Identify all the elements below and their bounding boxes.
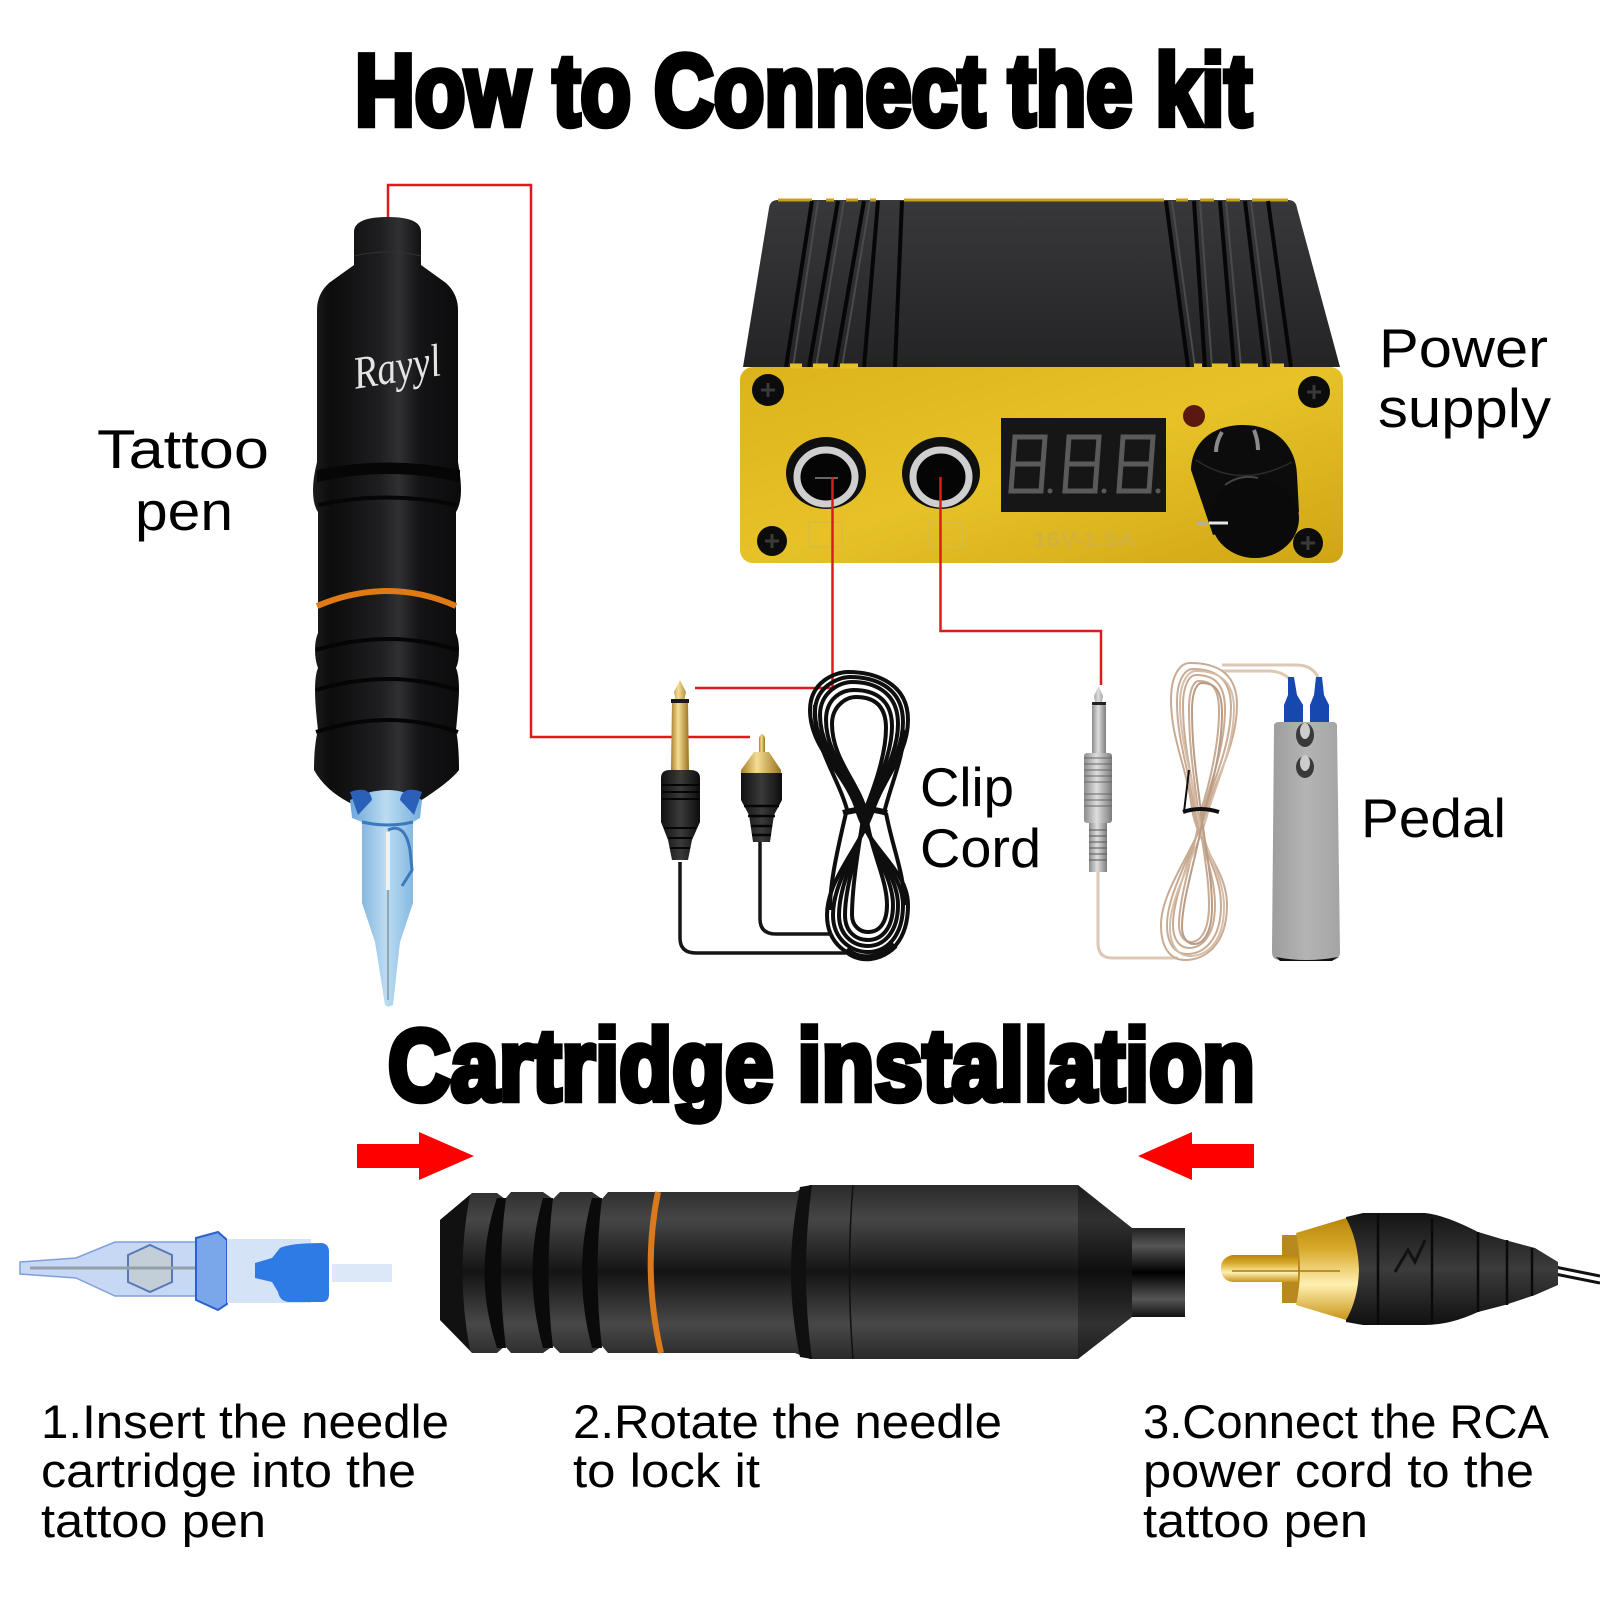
step 3 text: power cord to the	[1143, 1444, 1534, 1497]
jack plug	[661, 680, 700, 860]
plug body	[1346, 1213, 1558, 1325]
pedal wire	[1098, 665, 1319, 958]
panel markings	[809, 522, 962, 547]
pedal plate	[1272, 722, 1340, 960]
knob	[1191, 425, 1299, 558]
label: tattoo pen: pen	[135, 480, 233, 542]
logo text: Rayyl	[348, 334, 444, 399]
label: tattoo pen: Tattoo	[97, 418, 269, 480]
heading: cartridge installation: Cartridge installation	[388, 1010, 1255, 1122]
label: tattoo pen	[97, 418, 269, 542]
panel label: 16V-1.5A	[1033, 527, 1135, 552]
gold interior	[1282, 1235, 1300, 1303]
connector: left socket to clip cord	[695, 477, 832, 688]
step 3 text: 3.Connect the RCA	[1143, 1395, 1550, 1448]
step 1 text	[41, 1395, 449, 1547]
arrow: right	[357, 1132, 474, 1180]
socket left	[786, 437, 866, 509]
wire	[1555, 1267, 1600, 1283]
step 2 text	[573, 1395, 1002, 1497]
step 1 text: 1.Insert the needle	[41, 1395, 449, 1448]
blue connectors	[1284, 677, 1329, 722]
label: power supply: Power	[1379, 317, 1548, 379]
label: clip cord	[920, 756, 1041, 879]
front panel	[740, 367, 1343, 563]
icon: RCA plug horizontal	[1221, 1213, 1600, 1325]
label: power supply	[1378, 317, 1552, 439]
arrow: left	[1138, 1132, 1254, 1180]
gold shell	[1296, 1218, 1359, 1320]
step 2 text: to lock it	[573, 1444, 760, 1497]
cord wires	[680, 842, 846, 953]
RCA plug	[741, 734, 782, 842]
pedal jack	[1084, 686, 1112, 872]
step 2 text: 2.Rotate the needle	[573, 1395, 1002, 1448]
connector: pen to RCA	[388, 185, 750, 737]
coil	[810, 672, 908, 958]
step 3 text	[1143, 1395, 1550, 1547]
icon: pedal	[1084, 663, 1340, 961]
gold pin	[1221, 1255, 1298, 1282]
connector: right socket to pedal	[940, 477, 1101, 685]
icon: needle cartridge horizontal	[20, 1232, 392, 1310]
icon: tattoo pen horizontal	[440, 1185, 1185, 1359]
title: How to Connect the kit	[355, 35, 1252, 147]
screws	[752, 374, 1330, 558]
label: clip cord: Cord	[920, 817, 1041, 879]
LED	[1183, 405, 1205, 427]
pedal coil	[1161, 663, 1237, 960]
step 1 text: cartridge into the	[41, 1444, 416, 1497]
label: clip cord: Clip	[920, 756, 1014, 818]
cap	[1132, 1228, 1185, 1317]
display	[1001, 418, 1166, 512]
socket right	[902, 437, 980, 509]
grip grooves	[484, 1198, 602, 1348]
grip end	[440, 1195, 470, 1350]
step 1 text: tattoo pen	[41, 1494, 266, 1547]
top face	[743, 200, 1340, 367]
icon: power supply	[740, 200, 1343, 563]
icon: clip cord	[661, 672, 908, 958]
label: power supply: supply	[1378, 377, 1552, 439]
label: pedal: Pedal	[1361, 787, 1506, 849]
icon: needle cartridge on pen	[350, 790, 422, 1007]
step 3 text: tattoo pen	[1143, 1494, 1368, 1547]
terminals	[1296, 723, 1314, 778]
icon: orange ring	[317, 591, 456, 606]
orange ring	[651, 1192, 661, 1353]
icon: tattoo pen, vertical	[313, 217, 461, 803]
